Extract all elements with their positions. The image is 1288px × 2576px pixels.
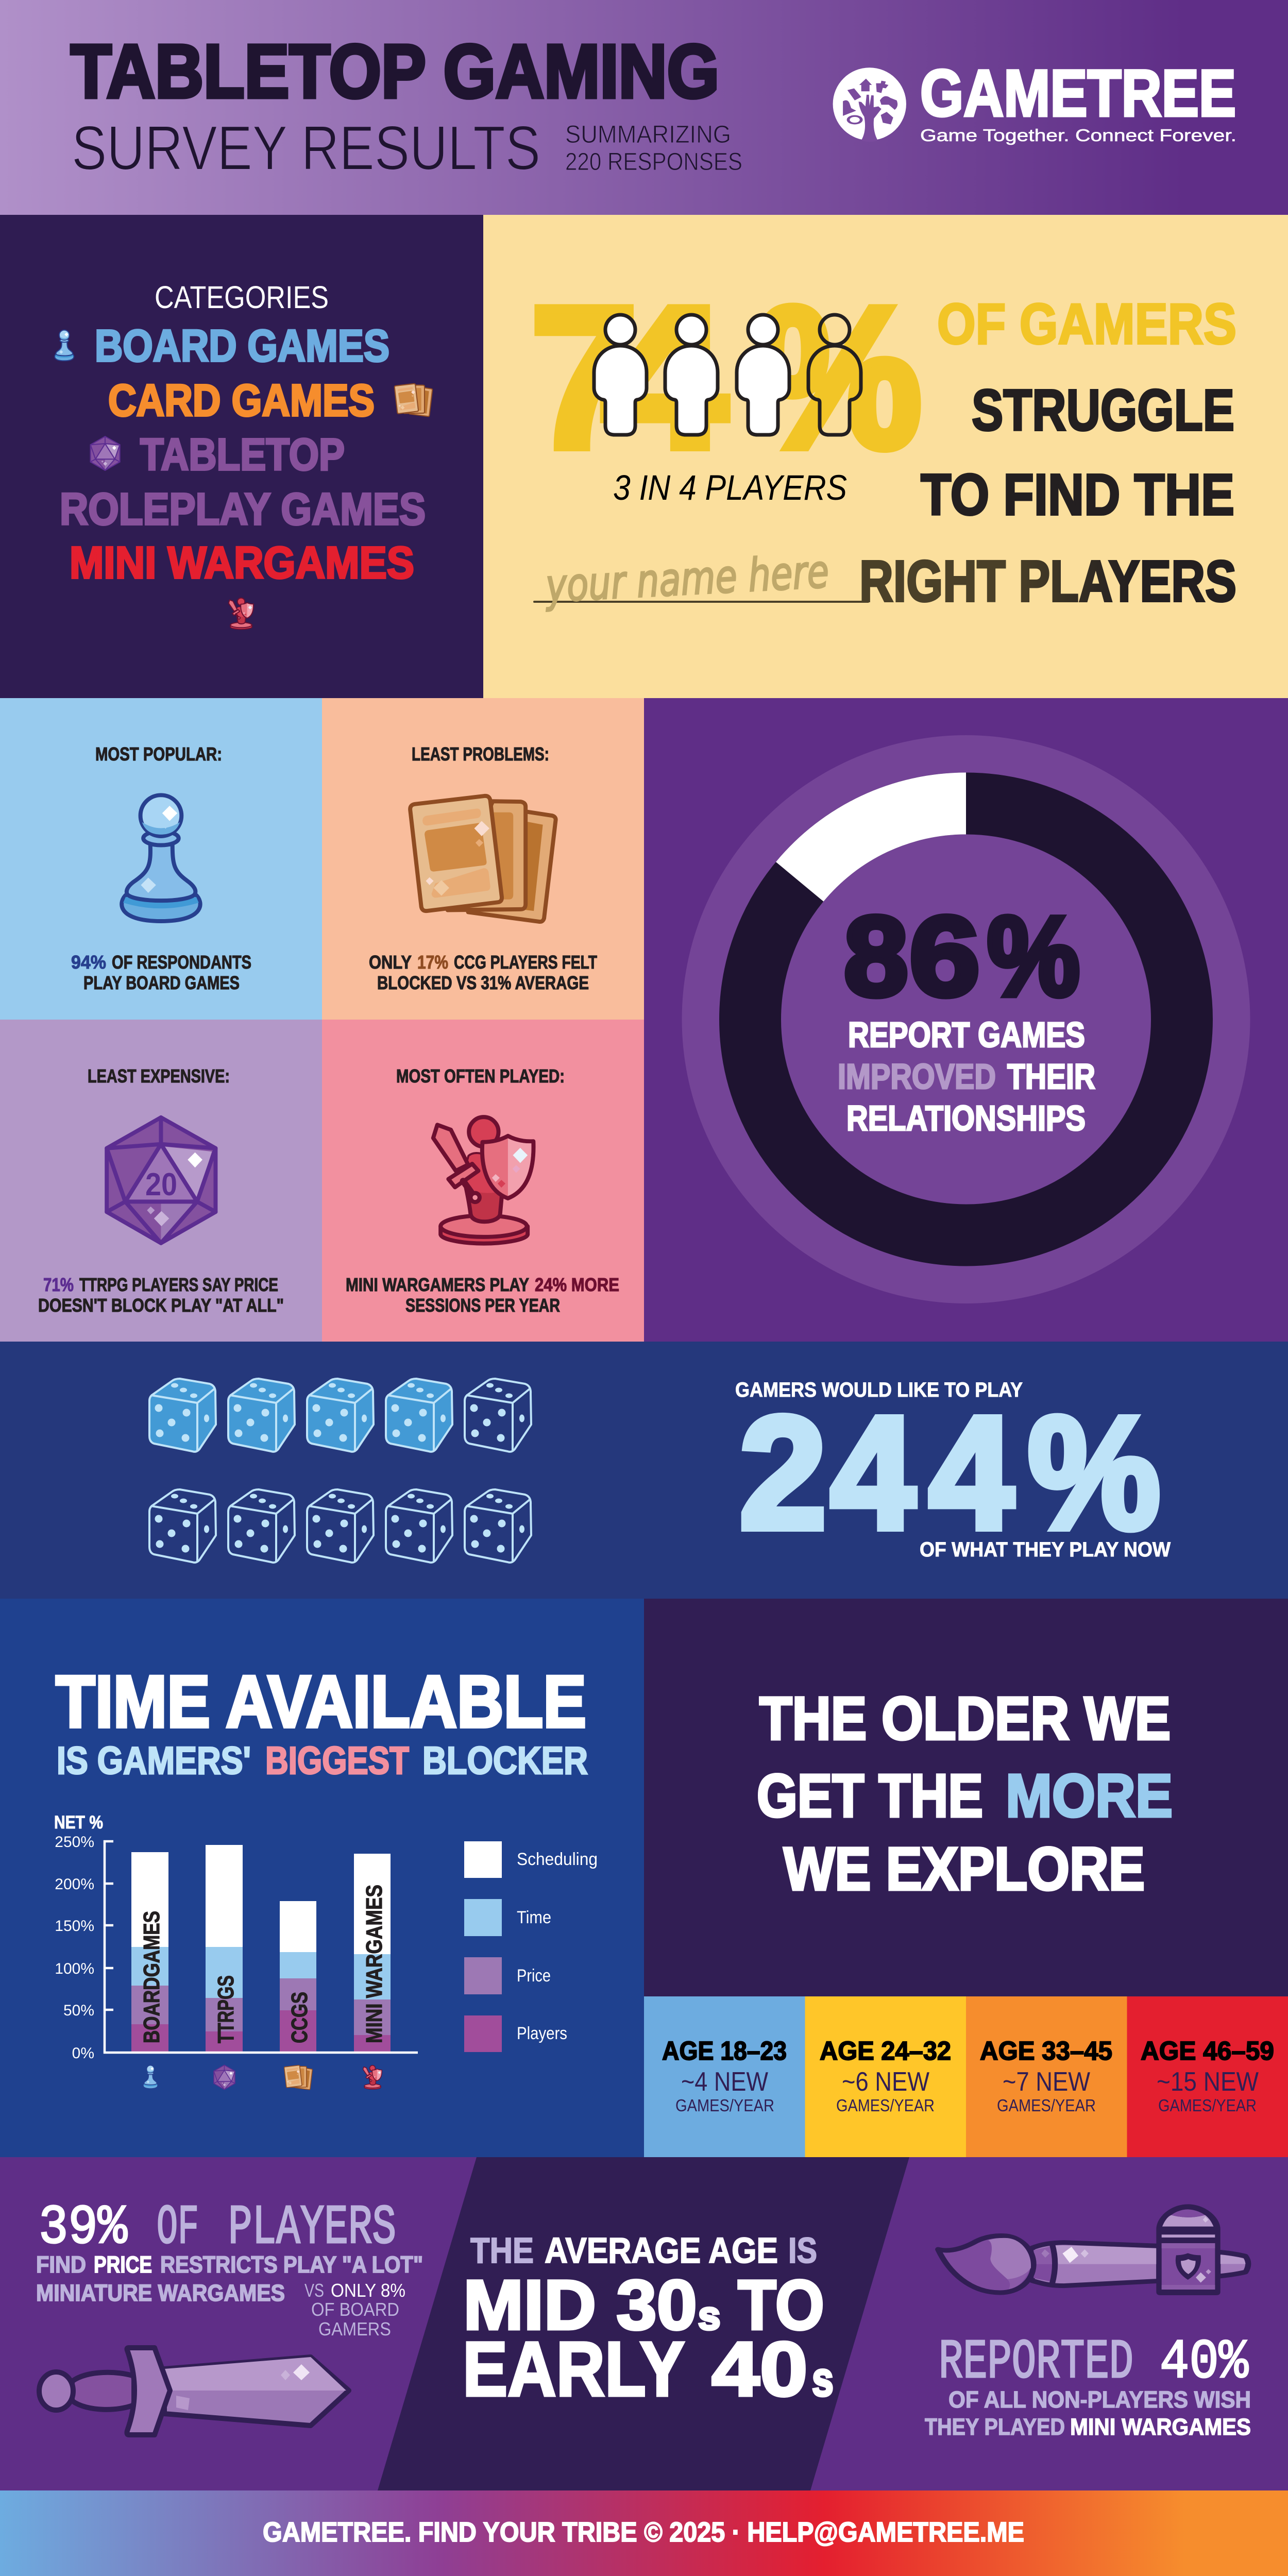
headline	[757, 1685, 1173, 1903]
icon: pawn	[122, 795, 200, 921]
caption: SESSIONS PER YEAR	[405, 1295, 560, 1316]
icon: d20	[91, 436, 120, 470]
to find the: TO FIND THE	[921, 462, 1234, 527]
bar: ttrpgs	[206, 1845, 243, 2052]
icon grid: dice	[149, 1379, 531, 1563]
icon: cards	[395, 384, 432, 416]
left stat: 39% of players: OF	[157, 2197, 199, 2260]
icon: pawn	[55, 330, 74, 361]
left stat: 39% of players: OF BOARD	[311, 2299, 399, 2320]
right stat: reported 40%	[925, 2331, 1251, 2440]
card games label: CARD GAMES	[108, 376, 375, 426]
mini wargames label: MINI WARGAMES	[70, 538, 414, 588]
chart legend: Players	[517, 2024, 567, 2043]
stacked bar chart: 100%	[55, 1960, 94, 1977]
age tile: 33-45	[966, 1996, 1127, 2157]
header banner	[0, 0, 1288, 215]
age tile: 18-23: AGE 18–23	[662, 2036, 787, 2065]
subheading: BLOCKER	[422, 1739, 588, 1782]
subheading: BIGGEST	[265, 1739, 409, 1782]
caption	[369, 952, 597, 993]
age tile: 18-23: GAMES/YEAR	[675, 2096, 774, 2115]
icon: paint brush	[938, 2204, 1248, 2295]
heading: LEAST EXPENSIVE:	[88, 1065, 230, 1087]
of gamers: OF GAMERS	[937, 292, 1236, 356]
age tile: 24-32: AGE 24–32	[820, 2036, 951, 2065]
panel: categories	[0, 215, 483, 698]
report text: REPORT GAMES	[848, 1015, 1085, 1055]
left stat: 39% of players: PRICE	[94, 2251, 152, 2278]
signature line	[533, 601, 869, 603]
icon: d20: 20	[145, 1167, 177, 1202]
headline: GET THE	[757, 1762, 983, 1830]
right stat: reported 40%: OF ALL NON-PLAYERS WISH	[948, 2386, 1251, 2413]
chart legend	[464, 1841, 598, 2052]
subheading	[57, 1739, 588, 1782]
gametree logo	[833, 57, 1236, 145]
age tile: 24-32	[805, 1996, 966, 2157]
title: TABLETOP GAMING	[71, 29, 719, 114]
panel: the older we get	[644, 1599, 1288, 1996]
icon: sword	[39, 2348, 349, 2435]
big 74% stat: %	[756, 265, 922, 489]
left stat: 39% of players: 39%	[39, 2197, 127, 2260]
244% stat: 4	[929, 1383, 1014, 1563]
caption: TTRPG PLAYERS SAY PRICE	[79, 1274, 278, 1295]
struggle: STRUGGLE	[972, 378, 1234, 443]
responses note	[565, 121, 742, 176]
chart category icons	[143, 2065, 382, 2090]
gamers would like to play: GAMERS WOULD LIKE TO PLAY	[735, 1379, 1023, 1401]
average age text	[463, 2230, 834, 2412]
of what they play now: OF WHAT THEY PLAY NOW	[920, 1538, 1171, 1561]
tabletop roleplay label: ROLEPLAY GAMES	[60, 484, 426, 534]
stacked bar chart: 150%	[55, 1918, 94, 1935]
report text: THEIR	[1007, 1057, 1095, 1096]
footer	[0, 2490, 1288, 2576]
left stat: 39% of players: FIND	[36, 2251, 86, 2278]
bar: boardgames: BOARDGAMES	[139, 1911, 164, 2043]
stacked bar chart: 0%	[72, 2045, 94, 2062]
average age text: THE	[470, 2230, 534, 2270]
right stat: reported 40%: 40%	[1160, 2331, 1248, 2394]
center dark band	[378, 2157, 909, 2490]
icon: cards	[410, 796, 556, 922]
86% stat: %	[987, 893, 1080, 1020]
big 74% stat: 7	[531, 265, 638, 489]
left stat: 39% of players	[36, 2197, 423, 2340]
gametree logo: GAMETREE	[920, 57, 1236, 130]
big 74% stat	[531, 265, 922, 489]
panel: most often played	[322, 1020, 644, 1342]
report text	[838, 1015, 1095, 1138]
headline: WE EXPLORE	[784, 1835, 1145, 1903]
caption	[38, 1274, 284, 1316]
tabletop roleplay label: TABLETOP	[140, 430, 345, 480]
right stat: reported 40%: MINI WARGAMES	[1070, 2414, 1251, 2440]
chart legend: Price	[517, 1966, 551, 1986]
average age text: 40	[711, 2326, 808, 2412]
average age text: s	[698, 2293, 720, 2338]
icon: miniature	[229, 598, 253, 629]
caption	[346, 1274, 619, 1316]
panel: 86 percent donut	[644, 698, 1288, 1342]
86% stat	[844, 893, 1080, 1020]
tabletop roleplay label	[60, 430, 426, 534]
panel: time available	[0, 1599, 644, 2157]
chart legend: Time	[517, 1908, 551, 1927]
age tile: 33-45: AGE 33–45	[980, 2036, 1112, 2065]
headline: THE OLDER WE	[759, 1685, 1171, 1753]
heading: TIME AVAILABLE	[56, 1661, 586, 1743]
headline: MORE	[1006, 1762, 1173, 1830]
panel: dice band	[0, 1342, 1288, 1599]
responses note: SUMMARIZING	[565, 121, 731, 148]
average age text: AVERAGE AGE	[545, 2230, 778, 2270]
age tile: 46-59	[1127, 1996, 1288, 2157]
bar: mini wargames: MINI WARGAMES	[362, 1885, 387, 2043]
age tile: 46-59: AGE 46–59	[1141, 2036, 1274, 2065]
panel: bottom purple band	[0, 2157, 1288, 2490]
panel: least expensive	[0, 1020, 322, 1342]
icon: miniature	[433, 1117, 534, 1244]
average age text: TO	[738, 2266, 824, 2345]
panel: 74 percent struggle	[483, 215, 1288, 698]
subtitle: SURVEY RESULTS	[72, 113, 540, 183]
caption: 71%	[43, 1274, 74, 1295]
chart legend: Scheduling	[517, 1850, 598, 1869]
bar: boardgames	[131, 1852, 168, 2052]
right stat: reported 40%: THEY PLAYED	[925, 2414, 1065, 2440]
age tile: 18-23	[644, 1996, 805, 2157]
left stat: 39% of players: PLAYERS	[228, 2197, 396, 2260]
average age text: IS	[788, 2230, 817, 2270]
caption: ONLY	[369, 952, 412, 973]
bar: ccgs	[280, 1901, 316, 2052]
left stat: 39% of players: ONLY 8%	[331, 2280, 405, 2301]
caption: 17%	[417, 952, 448, 973]
average age text: MID 30	[463, 2266, 697, 2345]
left stat: 39% of players: GAMERS	[318, 2318, 391, 2340]
your name here script: your name here	[543, 545, 830, 613]
3 in 4 players caption: 3 IN 4 PLAYERS	[613, 468, 847, 507]
86% stat: 8	[844, 893, 908, 1020]
244% stat: %	[1028, 1383, 1160, 1562]
right stat: reported 40%: REPORTED	[939, 2331, 1133, 2394]
panel: most popular	[0, 698, 322, 1020]
age tile: 18-23: ~4 NEW	[681, 2067, 768, 2097]
gametree logo: Game Together. Connect Forever.	[920, 126, 1236, 145]
categories heading: CATEGORIES	[155, 280, 329, 315]
age tile: 46-59: GAMES/YEAR	[1158, 2096, 1257, 2115]
caption: DOESN'T BLOCK PLAY "AT ALL"	[38, 1295, 284, 1316]
caption: 24% MORE	[535, 1274, 619, 1295]
donut chart	[682, 735, 1250, 1303]
caption: 94%	[71, 952, 106, 973]
panel: least problems	[322, 698, 644, 1020]
244% stat: 2	[739, 1383, 827, 1563]
bar: mini wargames	[354, 1854, 391, 2052]
big 74% stat: 4	[602, 265, 728, 489]
board games label: BOARD GAMES	[95, 321, 389, 371]
244% stat	[739, 1383, 1160, 1563]
caption: MINI WARGAMERS PLAY	[346, 1274, 529, 1295]
stacked bar chart: 50%	[63, 2002, 94, 2019]
icon: d20	[107, 1117, 215, 1243]
heading: MOST OFTEN PLAYED:	[396, 1065, 565, 1087]
heading: MOST POPULAR:	[95, 743, 222, 765]
bar: ccgs: CCGS	[287, 1992, 312, 2043]
report text: RELATIONSHIPS	[846, 1098, 1086, 1138]
report text: IMPROVED	[838, 1057, 996, 1096]
age tile: 46-59: ~15 NEW	[1157, 2067, 1259, 2097]
age tile: 24-32: GAMES/YEAR	[836, 2096, 935, 2115]
average age text: s	[812, 2352, 834, 2406]
left stat: 39% of players: RESTRICTS PLAY "A LOT"	[160, 2251, 423, 2278]
caption: OF RESPONDANTS	[112, 952, 251, 973]
footer: GAMETREE. FIND YOUR TRIBE © 2025 · HELP@GAMETREE.ME	[263, 2517, 1024, 2548]
left stat: 39% of players: VS	[304, 2280, 324, 2301]
responses note: 220 RESPONSES	[565, 148, 742, 176]
86% stat: 6	[909, 893, 980, 1020]
subheading: IS GAMERS'	[57, 1739, 251, 1782]
heading: LEAST PROBLEMS:	[412, 743, 549, 765]
caption: BLOCKED VS 31% AVERAGE	[377, 972, 589, 993]
caption	[71, 952, 251, 993]
244% stat: 4	[831, 1383, 916, 1563]
stacked bar chart: NET %	[54, 1812, 103, 1833]
average age text: EARLY	[463, 2326, 685, 2412]
stacked bar chart: 200%	[55, 1876, 94, 1893]
left stat: 39% of players: MINIATURE WARGAMES	[36, 2280, 285, 2306]
stacked bar chart	[54, 1812, 418, 2090]
caption: CCG PLAYERS FELT	[454, 952, 597, 973]
caption: PLAY BOARD GAMES	[83, 972, 240, 993]
stacked bar chart: 250%	[55, 1834, 94, 1851]
people icons: 3 in 4	[594, 315, 861, 435]
bar: ttrpgs: TTRPGS	[213, 1975, 239, 2043]
age tile: 24-32: ~6 NEW	[842, 2067, 929, 2097]
age tile: 33-45: GAMES/YEAR	[997, 2096, 1096, 2115]
age tile: 33-45: ~7 NEW	[1003, 2067, 1090, 2097]
